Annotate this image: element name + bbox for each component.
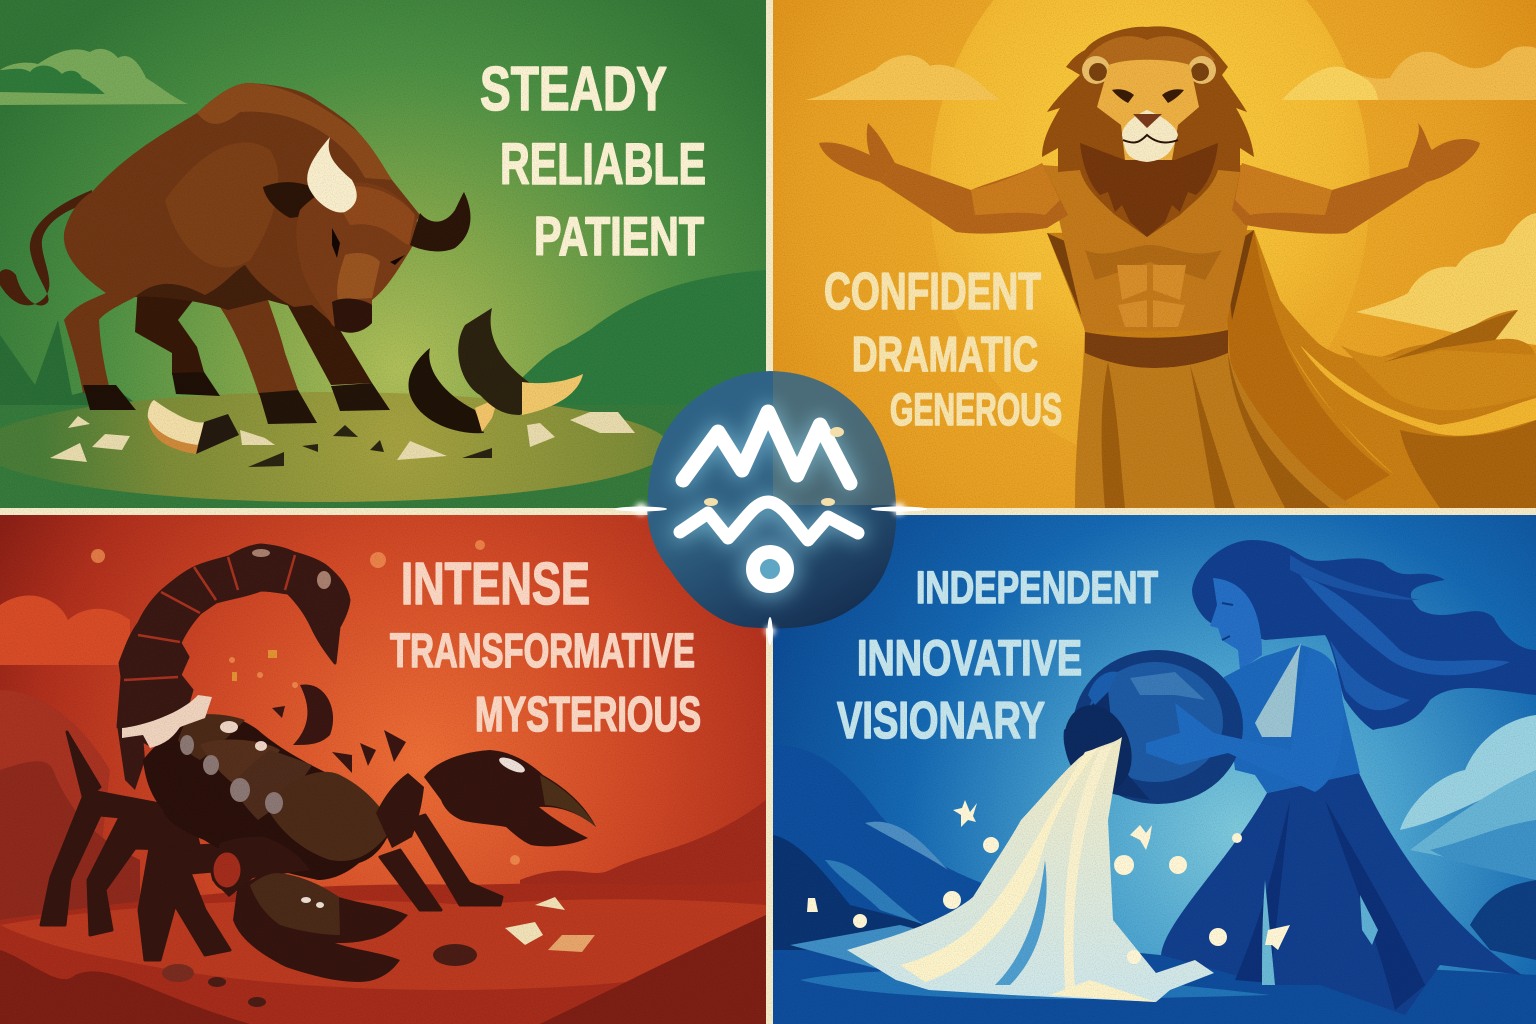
glyph: ring [753,552,787,586]
rock debris [50,412,635,467]
rock debris [162,897,595,1007]
panel: Scorpio red [0,515,766,1024]
text block: Taurus traits: PATIENT [534,205,704,267]
highlight on back [197,83,392,180]
head [296,182,418,332]
body [64,83,420,395]
skirt [1161,773,1522,1015]
text block: Scorpio traits: INTENSE [401,551,590,617]
far front leg [288,305,372,385]
near arm and hand [1146,648,1344,792]
text block: Scorpio traits [390,551,701,742]
text block: Taurus traits: RELIABLE [500,132,706,197]
icon: cape [1047,230,1536,508]
icon: clouds [805,46,1536,100]
legs [41,732,502,960]
embers [91,540,520,865]
icon: woman [1053,540,1536,1015]
small gold accents [704,427,844,506]
glyph: lower wave [680,502,858,540]
icon: water stream [847,737,1214,1002]
shadow belly [135,265,294,310]
body [143,715,392,880]
lower claw arm [212,837,310,897]
glyph glow [680,412,858,589]
belt [1085,330,1228,368]
far hand [1088,672,1118,705]
broken shell fragments [272,684,406,773]
arms [880,163,1068,234]
icon: sparkles and orbs [807,800,1290,964]
beard [1080,143,1218,237]
text block: Leo traits: GENEROUS [890,384,1062,435]
hair behind [1192,540,1536,730]
cloud and hills [0,596,766,1024]
white horn [307,137,357,213]
eye [332,228,340,258]
text block: Aquarius traits: INDEPENDENT [916,562,1158,613]
skirt [1075,353,1351,508]
icon: lion man [819,26,1480,508]
text block: Aquarius traits: VISIONARY [837,692,1045,750]
text block: Aquarius traits [837,562,1158,750]
icon: broken horn piece left [148,400,239,454]
ground [0,392,664,508]
face and neck [1210,578,1262,670]
text block: Aquarius traits: INNOVATIVE [857,630,1082,686]
tail highlights [252,549,331,589]
hooves [83,385,136,410]
torso [1224,645,1360,793]
ears [1082,56,1216,84]
cloud lower right [1356,213,1536,345]
hands [819,123,895,182]
tail [118,545,349,745]
sun [930,0,1370,460]
tail segment lines [124,555,295,680]
hills [0,270,766,405]
center medallion: Aquarius glyph [615,371,927,645]
waves and hills [773,715,1536,1024]
ear [263,182,318,218]
text block: Leo traits [824,263,1062,435]
mane [1042,26,1254,237]
lower claw [233,873,408,982]
upper claw arm [376,773,424,848]
frill [122,695,212,748]
upper claw [424,750,596,846]
jar [1073,650,1243,804]
torso [1042,165,1250,332]
panel: Taurus green [0,0,766,508]
glyph: top wave [683,412,850,483]
panel: Leo yellow [773,0,1536,508]
panel: Aquarius blue [773,515,1536,1024]
icon: distant cloud [0,49,188,105]
top-right tint [773,371,896,505]
icon: broken horn pieces right [408,308,583,433]
disc [647,371,896,628]
text block: Scorpio traits: TRANSFORMATIVE [390,625,695,678]
icon: bull [0,83,470,424]
dark horn [410,192,470,251]
far rear leg [135,296,204,375]
text block: Leo traits: DRAMATIC [852,328,1038,382]
tail [0,190,92,306]
face [1097,60,1199,160]
text block: Taurus traits: STEADY [480,55,667,124]
abdomen muscles [1085,245,1222,280]
text block: Scorpio traits: MYSTERIOUS [475,688,701,742]
text block: Taurus traits [480,66,705,256]
text block: Leo traits: CONFIDENT [824,263,1041,321]
muzzle [1122,110,1178,162]
lens flares [615,503,927,645]
icon: scorpion [41,545,596,982]
